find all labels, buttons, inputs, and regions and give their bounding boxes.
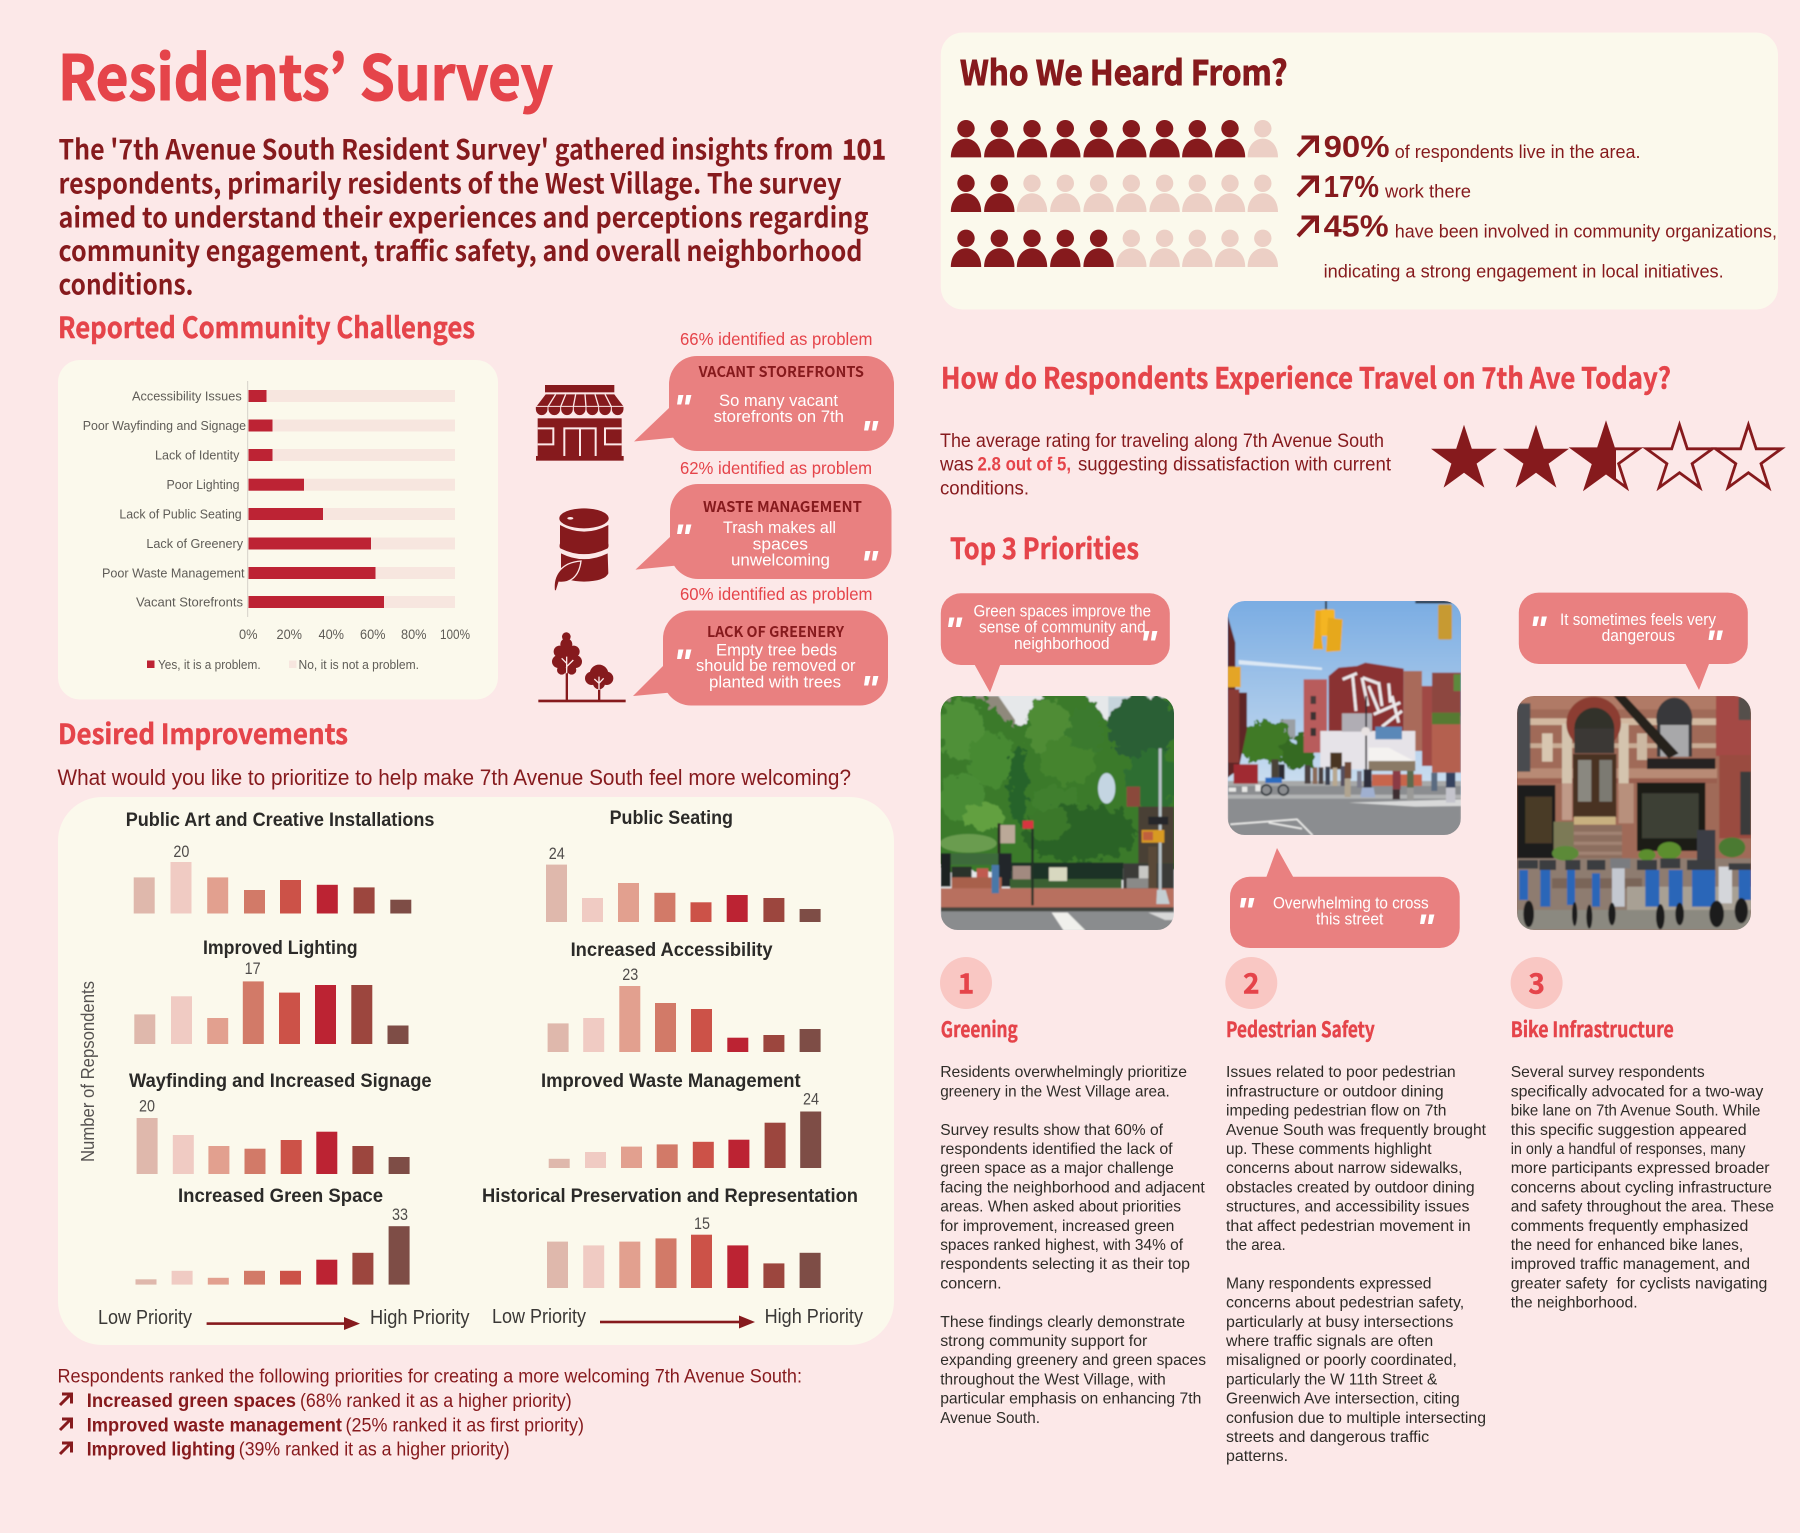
body text: pedestrian safety: the area. (1226, 1237, 1286, 1254)
callout: lack of greenery: " (860, 669, 879, 711)
number badge 1 (940, 957, 992, 1009)
x axis labels: 0% (239, 627, 258, 642)
body text: pedestrian safety: impeding pedestrian flow on 7th (1226, 1103, 1446, 1120)
body text: pedestrian safety: Avenue South was frequently brought (1226, 1122, 1487, 1139)
callout: waste management (636, 458, 892, 586)
quote bubble: pedestrian safety: " (1416, 908, 1435, 950)
callout: vacant storefronts: storefronts on 7th (714, 407, 844, 426)
x axis labels: 80% (401, 627, 426, 642)
body text: greening: areas. When asked about priorities (940, 1199, 1181, 1216)
quote bubble: bike infrastructure (1519, 593, 1748, 690)
body text: pedestrian safety: where traffic signals are often (1225, 1333, 1433, 1350)
stat: 90 percent (1298, 129, 1640, 164)
callout: lack of greenery: Empty tree beds (716, 640, 837, 660)
body text: pedestrian safety: infrastructure or outdoor dining (1226, 1083, 1444, 1100)
callout: lack of greenery: LACK OF GREENERY (707, 621, 844, 642)
panel: who we heard from (941, 32, 1778, 310)
callout: waste management: Trash makes all (723, 518, 836, 537)
priority 3 (60, 1440, 510, 1460)
body text: pedestrian safety: streets and dangerous traffic (1226, 1429, 1429, 1446)
number badge 2 (1225, 957, 1277, 1009)
body text: pedestrian safety: Greenwich Ave intersection, citing (1226, 1391, 1460, 1408)
y axis label: Number of Repsondents (78, 981, 98, 1162)
callout: waste management: " (673, 518, 692, 560)
body text: pedestrian safety: up. These comments highlight (1226, 1141, 1432, 1158)
body text: bike infrastructure: specifically advocated for a two-way (1511, 1083, 1763, 1100)
category labels: Accessibility Issues (132, 388, 242, 404)
body text: bike infrastructure: in only a handful of responses, many (1511, 1141, 1746, 1158)
quote bubble: greening: " (1139, 624, 1158, 666)
pictogram: 45 percent (951, 230, 1278, 267)
body text: pedestrian safety: misaligned or poorly coordinated, (1226, 1352, 1457, 1369)
callout: vacant storefronts: " (673, 388, 692, 430)
body text: bike infrastructure: this specific suggestion appeared (1511, 1122, 1747, 1139)
chart: green space: 33 (392, 1206, 408, 1224)
pictogram: 90 percent (951, 120, 1278, 157)
category labels: Vacant Storefronts (136, 594, 243, 610)
icon: storefront (535, 385, 624, 461)
callout: waste management: WASTE MANAGEMENT (703, 496, 862, 517)
quote bubble: bike infrastructure: " (1528, 610, 1548, 652)
stat: 45 percent: 45% (1324, 209, 1389, 244)
pictogram: 17 percent (951, 175, 1278, 212)
x axis labels: 40% (318, 627, 344, 642)
rating paragraph: conditions. (940, 478, 1029, 500)
stat: 17 percent: work there (1384, 181, 1471, 202)
priority 2: (25% ranked it as first priority) (346, 1416, 584, 1436)
callout: vacant storefronts: So many vacant (719, 391, 838, 410)
priority scale right (492, 1306, 863, 1328)
body text: pedestrian safety: concerns about narrow sidewalks, (1226, 1160, 1462, 1177)
title: Residents’ Survey (58, 28, 553, 118)
bar tracks (248, 390, 455, 608)
priority 1: (68% ranked it as a higher priority) (300, 1391, 572, 1412)
callout: lack of greenery: 60% identified as problem (680, 584, 872, 604)
x axis labels: 60% (360, 627, 386, 642)
body text: pedestrian safety: concerns about pedestrian safety, (1226, 1295, 1464, 1312)
body text: bike infrastructure: more participants expressed broader (1511, 1160, 1770, 1177)
callout: vacant storefronts: VACANT STOREFRONTS (698, 361, 864, 382)
body text: bike infrastructure: improved traffic management, and (1511, 1256, 1750, 1273)
body text: greening: facing the neighborhood and adjacent (940, 1179, 1205, 1196)
chart: public seating (546, 808, 821, 922)
intro paragraph: conditions. (58, 264, 194, 304)
rating paragraph: 2.8 out of 5, (978, 455, 1071, 476)
callout: lack of greenery: planted with trees (709, 673, 841, 692)
chart: green space (136, 1186, 410, 1285)
body text: bike infrastructure: concerns about cycling infrastructure (1511, 1179, 1772, 1196)
body text: pedestrian safety: Many respondents expressed (1226, 1275, 1432, 1292)
body text: greening: for improvement, increased green (940, 1218, 1174, 1235)
star rating (1431, 425, 1781, 488)
category labels: Poor Waste Management (102, 566, 245, 580)
priority scale left: High Priority (370, 1307, 470, 1329)
intro paragraph: The '7th Avenue South Resident Survey' gathered insights from (58, 128, 834, 168)
priority 1: Increased green spaces (87, 1391, 296, 1412)
rating paragraph (939, 431, 1392, 500)
ranked priorities text (58, 1366, 802, 1460)
quote bubble: greening (941, 593, 1170, 692)
chart: wayfinding: Wayfinding and Increased Signage (129, 1071, 432, 1092)
chart: improved lighting (134, 938, 409, 1044)
category labels: Poor Wayfinding and Signage (83, 418, 246, 433)
rating paragraph: suggesting dissatisfaction with current (1078, 455, 1392, 476)
priority 2: Improved waste management (87, 1416, 343, 1436)
chart: improved lighting: Improved Lighting (203, 938, 358, 959)
body text: bike infrastructure: and safety throughout the area. These (1511, 1199, 1774, 1216)
ranked priorities text: Respondents ranked the following priorities for creating a more welcoming 7th Avenue South: (58, 1366, 802, 1387)
chart: public seating: 24 (549, 845, 565, 863)
stat: 17 percent (1298, 169, 1471, 204)
chart: public art (126, 810, 434, 914)
number badge 2: 2 (1243, 962, 1260, 1002)
callout: lack of greenery: " (673, 642, 692, 684)
priority 1 (60, 1391, 572, 1412)
body text: pedestrian safety: obstacles created by outdoor dining (1226, 1179, 1475, 1196)
callout: vacant storefronts: " (860, 414, 879, 456)
body text: greening: particular emphasis on enhancing 7th (940, 1391, 1201, 1408)
body text: greening: expanding greenery and green spaces (940, 1352, 1206, 1369)
quote bubble: greening: sense of community and (979, 618, 1146, 637)
quote bubble: pedestrian safety: this street (1316, 910, 1384, 929)
callout: waste management: 62% identified as problem (680, 458, 872, 478)
body text: pedestrian safety: confusion due to multiple intersecting (1226, 1410, 1486, 1427)
body text: greening: spaces ranked highest, with 34% of (940, 1237, 1184, 1254)
quote bubble: pedestrian safety (1230, 848, 1460, 950)
category labels: Poor Lighting (166, 477, 240, 492)
intro paragraph: 101 (842, 128, 886, 168)
body text: bike infrastructure (1511, 1064, 1774, 1312)
body text: bike infrastructure: bike lane on 7th Avenue South. While (1511, 1103, 1760, 1120)
body text: pedestrian safety: particularly the W 11th Street & (1226, 1371, 1438, 1388)
photo: brownstone with bike share (1512, 690, 1757, 935)
chart: public art: Public Art and Creative Installations (126, 810, 434, 831)
body text: greening: respondents selecting it as their top (940, 1256, 1190, 1273)
column: greening (940, 957, 1206, 1427)
body text: pedestrian safety: structures, and accessibility issues (1226, 1199, 1469, 1216)
body text: greening: green space as a major challenge (940, 1160, 1174, 1177)
body text: bike infrastructure: the neighborhood. (1511, 1295, 1638, 1312)
panel: challenges bar chart (58, 360, 498, 700)
body text: bike infrastructure: Several survey respondents (1511, 1064, 1705, 1081)
category labels: Lack of Identity (155, 448, 240, 462)
chart: historical preservation: Historical Preservation and Representation (482, 1186, 858, 1207)
callout: lack of greenery: should be removed or (696, 656, 856, 675)
body text: pedestrian safety: that affect pedestrian movement in (1226, 1218, 1471, 1235)
category labels (83, 388, 246, 610)
number badge 1: 1 (958, 962, 974, 1002)
stat: 45 percent: have been involved in community organizations, (1395, 220, 1777, 242)
intro paragraph (58, 128, 886, 304)
stat: 90 percent: of respondents live in the area. (1395, 141, 1640, 162)
panel: priority bar charts (58, 797, 894, 1345)
number badge 3: 3 (1528, 962, 1545, 1002)
body text: greening: Residents overwhelmingly prioritize (940, 1064, 1187, 1081)
photo: green park corner (940, 696, 1174, 930)
chart: waste management: Improved Waste Management (541, 1071, 801, 1092)
priority scale left (98, 1307, 470, 1330)
body text: greening: Avenue South. (940, 1410, 1040, 1427)
heading: reported community challenges: Reported Community Challenges (58, 305, 475, 347)
priority scale right: High Priority (765, 1306, 863, 1328)
chart: public art: 20 (173, 843, 189, 861)
quote bubble: bike infrastructure: " (1704, 624, 1724, 666)
quote bubble: greening: Green spaces improve the (974, 602, 1151, 621)
body text: greening: respondents identified the lack of (940, 1141, 1173, 1158)
body text: pedestrian safety (1225, 1064, 1487, 1465)
heading: desired improvements: Desired Improvements (58, 713, 348, 753)
rating paragraph: was (939, 455, 974, 476)
icon: trees (538, 632, 626, 702)
intro paragraph: community engagement, traffic safety, and overall neighborhood (58, 230, 862, 270)
priority scale right: Low Priority (492, 1306, 586, 1328)
body text: greening: Survey results show that 60% of (940, 1122, 1164, 1139)
chart: increased accessibility (548, 940, 821, 1052)
x axis labels: 100% (440, 627, 470, 642)
chart: increased accessibility: Increased Accessibility (571, 940, 773, 961)
number badge 3 (1511, 957, 1563, 1009)
body text: greening: strong community support for (940, 1333, 1148, 1350)
body text: pedestrian safety: particularly at busy intersections (1226, 1314, 1453, 1331)
heading: bike infrastructure: Bike Infrastructure (1511, 1014, 1674, 1044)
heading: travel experience: How do Respondents Experience Travel on 7th Ave Today? (941, 356, 1671, 398)
body text: greening: These findings clearly demonstrate (940, 1314, 1185, 1331)
chart: historical preservation: 15 (694, 1215, 710, 1233)
legend (147, 657, 419, 672)
rating paragraph: The average rating for traveling along 7th Avenue South (940, 431, 1384, 452)
body text: bike infrastructure: comments frequently emphasized (1511, 1218, 1748, 1235)
callout: waste management: spaces (753, 534, 808, 554)
icon: waste barrel (554, 508, 609, 591)
chart: wayfinding: 20 (139, 1098, 155, 1116)
legend: No, it is not a problem. (298, 657, 419, 672)
body text: bike infrastructure: greater safety for cyclists navigating (1511, 1275, 1767, 1292)
chart: improved lighting: 17 (245, 960, 261, 978)
intro paragraph: aimed to understand their experiences and perceptions regarding (58, 196, 869, 236)
chart: waste management (541, 1071, 821, 1168)
bars: yes it is a problem (248, 390, 384, 608)
heading: who we heard from: Who We Heard From? (960, 46, 1288, 95)
photo: street crossing with graffiti building (1222, 596, 1467, 836)
callout: waste management: unwelcoming (731, 550, 830, 570)
stat: 90 percent: 90% (1324, 129, 1390, 164)
column: bike infrastructure (1511, 957, 1774, 1312)
stat: 45 percent: indicating a strong engagement in local initiatives. (1324, 261, 1724, 282)
intro paragraph: respondents, primarily residents of the West Village. The survey (58, 162, 842, 202)
question text: What would you like to prioritize to help make 7th Avenue South feel more welcoming? (58, 765, 851, 790)
quote bubble: pedestrian safety: " (1236, 891, 1255, 933)
stat: 17 percent: 17% (1324, 169, 1379, 204)
stat: 45 percent (1298, 209, 1777, 282)
heading: pedestrian safety: Pedestrian Safety (1226, 1014, 1375, 1044)
chart: waste management: 24 (803, 1091, 819, 1109)
body text: pedestrian safety: patterns. (1226, 1448, 1288, 1465)
body text: greening: concern. (940, 1275, 1002, 1292)
quote bubble: bike infrastructure: dangerous (1602, 626, 1675, 645)
category labels: Lack of Public Seating (119, 506, 242, 522)
body text: greening (940, 1064, 1206, 1427)
body text: greening: greenery in the West Village area. (940, 1083, 1170, 1100)
callout: waste management: " (860, 544, 879, 586)
callout: vacant storefronts: 66% identified as problem (680, 329, 872, 349)
heading: top 3 priorities: Top 3 Priorities (950, 526, 1139, 568)
callout: lack of greenery (633, 584, 888, 711)
chart: historical preservation (482, 1186, 858, 1288)
legend: Yes, it is a problem. (158, 657, 261, 672)
quote bubble: bike infrastructure: It sometimes feels very (1560, 610, 1716, 629)
quote bubble: greening: neighborhood (1014, 634, 1110, 653)
chart: wayfinding (129, 1071, 432, 1174)
x axis labels (239, 627, 470, 642)
x axis labels: 20% (276, 627, 302, 642)
body text: greening: throughout the West Village, with (940, 1371, 1166, 1388)
priority scale left: Low Priority (98, 1307, 192, 1329)
body text: pedestrian safety: Issues related to poor pedestrian (1226, 1064, 1456, 1081)
callout: vacant storefronts (634, 329, 894, 456)
heading: greening: Greening (941, 1014, 1018, 1044)
category labels: Lack of Greenery (146, 536, 243, 551)
priority 2 (60, 1416, 584, 1436)
priority 3: (39% ranked it as a higher priority) (239, 1440, 510, 1460)
priority 3: Improved lighting (87, 1440, 235, 1460)
chart: increased accessibility: 23 (622, 966, 638, 984)
chart: green space: Increased Green Space (178, 1186, 383, 1207)
chart: public seating: Public Seating (610, 808, 733, 829)
column: pedestrian safety (1225, 957, 1487, 1465)
quote bubble: greening: " (944, 611, 963, 653)
body text: bike infrastructure: the need for enhanced bike lanes, (1511, 1237, 1743, 1254)
quote bubble: pedestrian safety: Overwhelming to cross (1273, 894, 1429, 913)
